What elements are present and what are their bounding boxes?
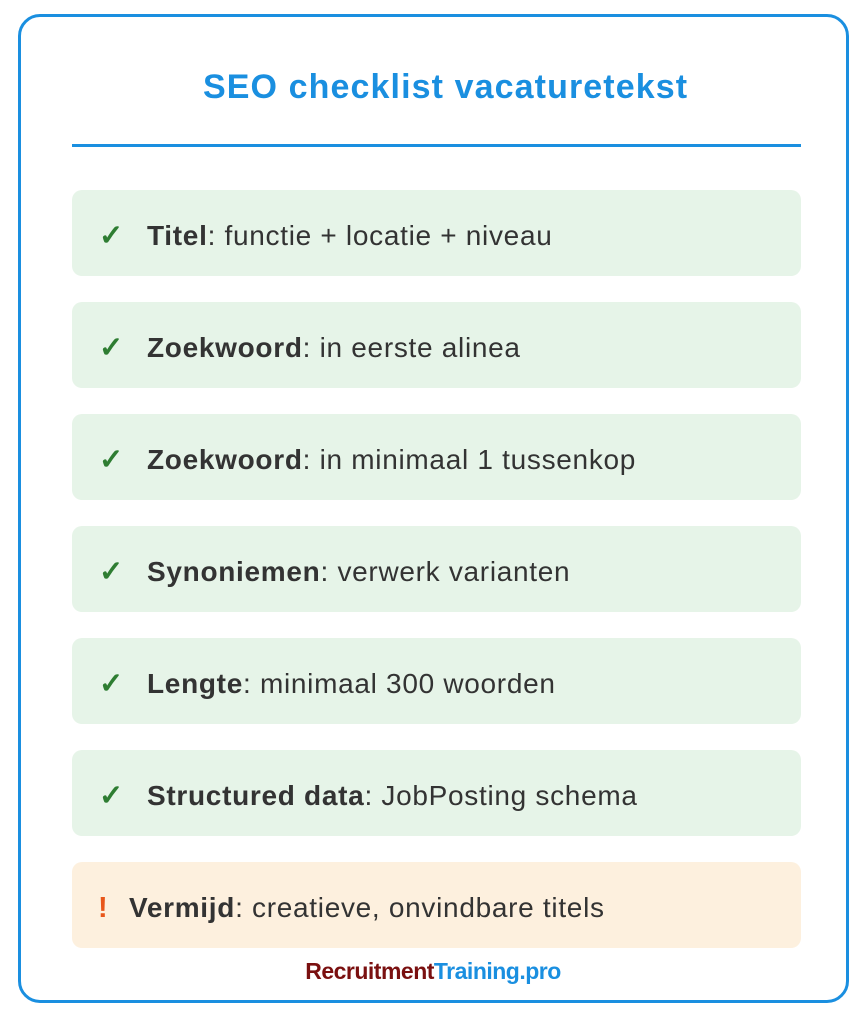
row: lengte: ✓ bbox=[99, 668, 124, 700]
row: titel bbox=[72, 190, 801, 276]
row: structured data: ✓ bbox=[99, 780, 124, 812]
row: lengte bbox=[72, 638, 801, 724]
row: warning vermijd bbox=[72, 862, 801, 948]
row: synoniemen: ✓ bbox=[99, 556, 124, 588]
title: SEO checklist vacaturetekst bbox=[203, 68, 688, 106]
row: zoekwoord tussenkop: ✓ bbox=[99, 444, 124, 476]
footer logo: RecruitmentTraining.pro bbox=[305, 958, 561, 984]
row: synoniemen bbox=[72, 526, 801, 612]
row: titel: ✓ bbox=[99, 220, 124, 252]
row: warning vermijd: ! bbox=[98, 892, 108, 924]
row: zoekwoord alinea: Zoekwoord: in eerste alinea bbox=[147, 332, 521, 363]
row: structured data: Structured data: JobPosting schema bbox=[147, 780, 638, 811]
row: titel: Titel: functie + locatie + niveau bbox=[147, 220, 552, 251]
row: zoekwoord tussenkop bbox=[72, 414, 801, 500]
row: zoekwoord alinea bbox=[72, 302, 801, 388]
row: synoniemen: Synoniemen: verwerk varianten bbox=[147, 556, 570, 587]
row: structured data bbox=[72, 750, 801, 836]
row: zoekwoord tussenkop: Zoekwoord: in minimaal 1 tussenkop bbox=[147, 444, 636, 475]
row: warning vermijd: Vermijd: creatieve, onvindbare titels bbox=[129, 892, 605, 923]
row: zoekwoord alinea: ✓ bbox=[99, 332, 124, 364]
row: lengte: Lengte: minimaal 300 woorden bbox=[147, 668, 556, 699]
